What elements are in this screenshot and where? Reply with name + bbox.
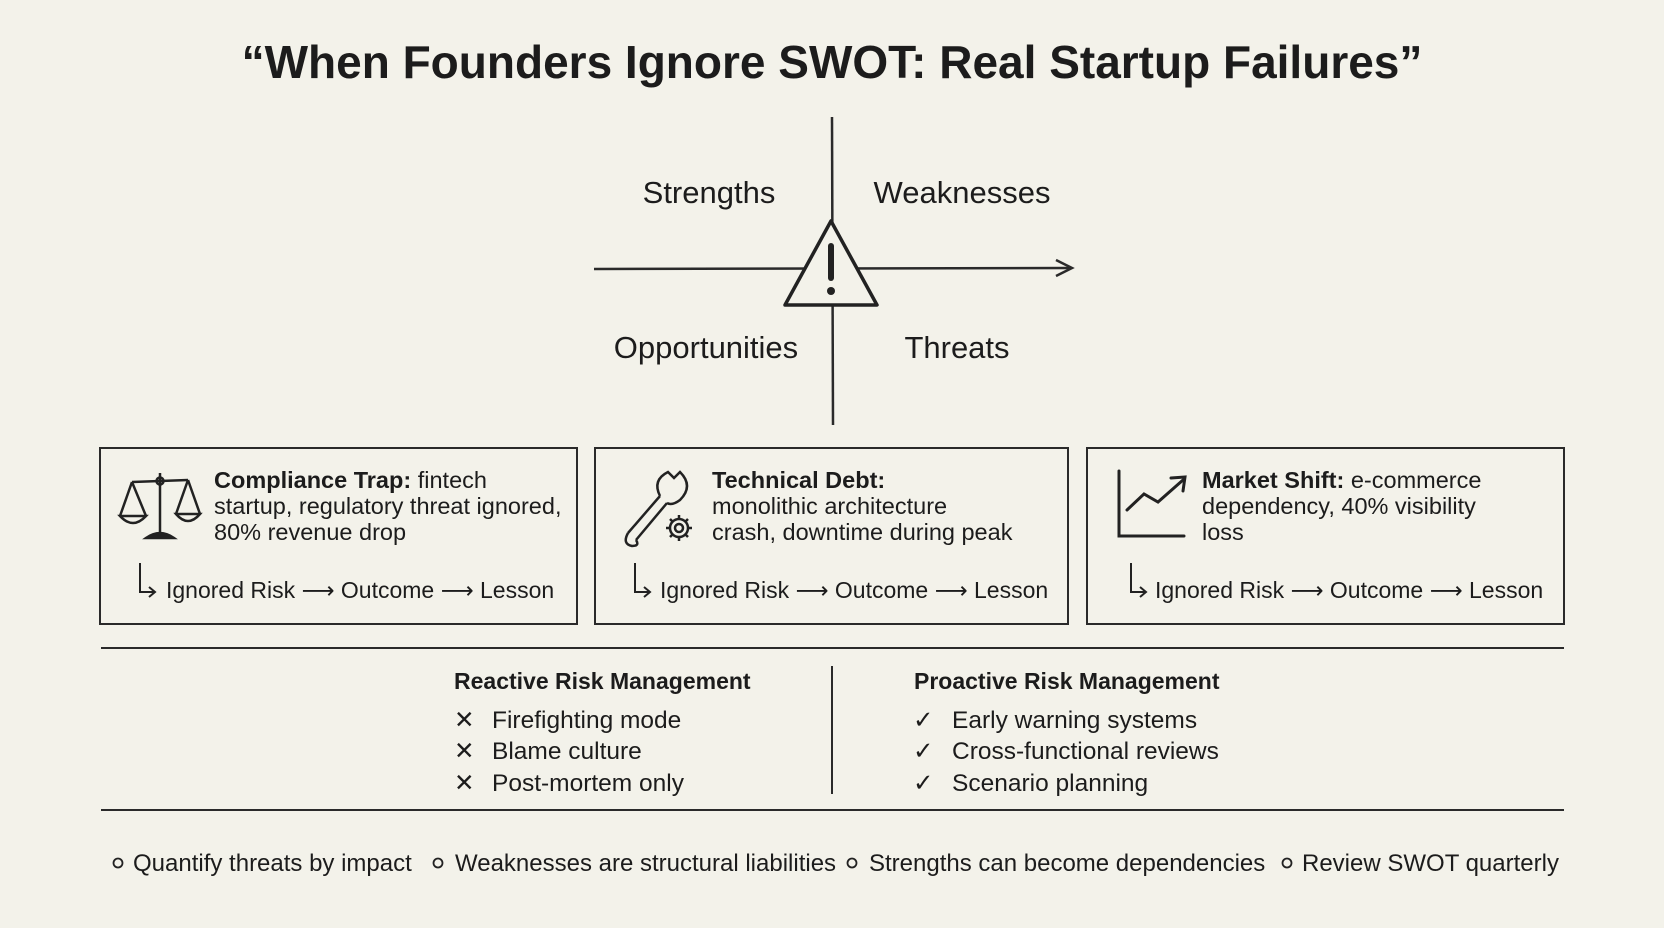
flow: [635, 563, 1048, 604]
flow: [1131, 563, 1543, 604]
panel: reactive risk management: [454, 668, 751, 797]
icon: wrench and gear: [626, 472, 692, 546]
panel: reactive risk management: ✕: [454, 738, 475, 765]
panel: reactive risk management: ✕: [454, 770, 475, 797]
bottom takeaways: [114, 850, 1559, 877]
horizontal axis arrow: [594, 260, 1072, 276]
panel: reactive risk management: Blame culture: [492, 738, 642, 765]
panel: reactive risk management: Post-mortem only: [492, 770, 685, 797]
bottom takeaways: Weaknesses are structural liabilities: [455, 850, 836, 877]
label: Threats: Threats: [904, 330, 1010, 365]
flow: Ignored Risk ⟶ Outcome ⟶ Lesson: [166, 577, 554, 604]
title: “When Founders Ignore SWOT: Real Startup Failures”: [242, 36, 1422, 88]
label: Opportunities: Opportunities: [614, 330, 798, 365]
panel: proactive risk management: [913, 668, 1220, 797]
text block: crash, downtime during peak: [712, 519, 1013, 545]
text block: Technical Debt:: [712, 467, 885, 493]
panel: compliance trap: [100, 448, 577, 624]
icon: scales: [120, 473, 200, 538]
text block: Compliance Trap: fintech: [214, 467, 487, 493]
icon: line chart: [1119, 471, 1185, 536]
panel: proactive risk management: Scenario planning: [952, 770, 1148, 797]
panel: technical debt: [595, 448, 1068, 624]
panel: proactive risk management: ✓: [913, 707, 934, 734]
vertical axis: [832, 117, 833, 425]
text block: startup, regulatory threat ignored,: [214, 493, 561, 519]
panel: reactive risk management: ✕: [454, 707, 475, 734]
panel: reactive risk management: Reactive Risk Management: [454, 668, 751, 694]
bottom takeaways: Strengths can become dependencies: [869, 850, 1265, 877]
panel: market shift: [1087, 448, 1564, 624]
text block: 80% revenue drop: [214, 519, 406, 545]
label: Weaknesses: Weaknesses: [874, 175, 1050, 210]
panel: proactive risk management: Cross-functional reviews: [952, 738, 1219, 765]
bottom takeaways: Review SWOT quarterly: [1302, 850, 1559, 877]
text block: loss: [1202, 519, 1244, 545]
text block: Market Shift: e-commerce: [1202, 467, 1481, 493]
bottom takeaways: Quantify threats by impact: [133, 850, 412, 877]
icon: warning triangle: [785, 221, 877, 305]
panel: proactive risk management: Early warning systems: [952, 707, 1197, 734]
flow: Ignored Risk ⟶ Outcome ⟶ Lesson: [660, 577, 1048, 604]
text block: monolithic architecture: [712, 493, 947, 519]
panel: proactive risk management: ✓: [913, 738, 934, 765]
panel: proactive risk management: ✓: [913, 770, 934, 797]
flow: [140, 563, 554, 604]
panel: proactive risk management: Proactive Risk Management: [914, 668, 1220, 694]
panel: reactive risk management: Firefighting mode: [492, 707, 681, 734]
label: Strengths: Strengths: [643, 175, 775, 210]
flow: Ignored Risk ⟶ Outcome ⟶ Lesson: [1155, 577, 1543, 604]
SWOT diagram: [594, 117, 1072, 425]
text block: dependency, 40% visibility: [1202, 493, 1476, 519]
